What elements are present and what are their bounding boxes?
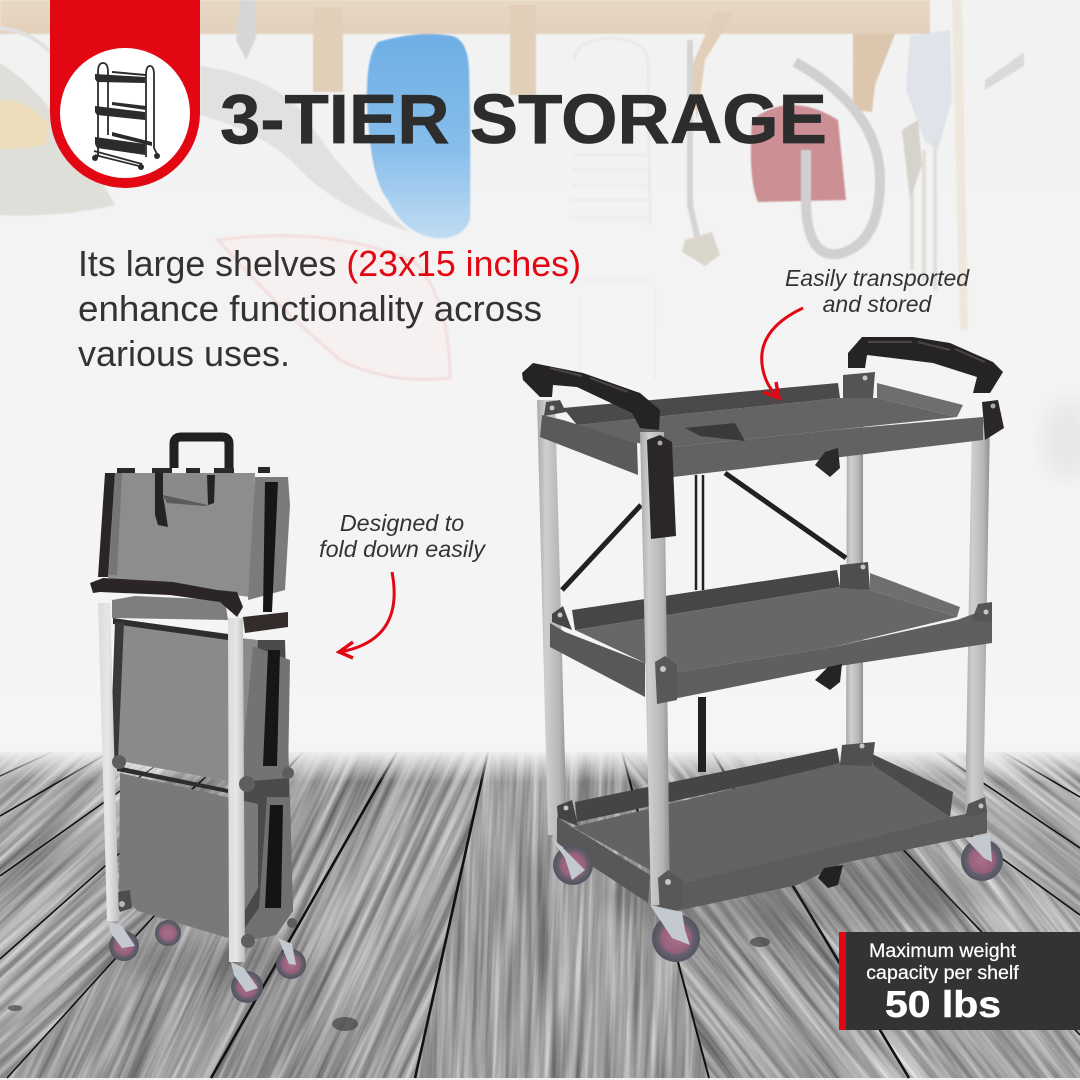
folding lock plates xyxy=(647,400,1004,539)
wall rack xyxy=(985,52,1024,90)
wood knots xyxy=(8,937,770,1031)
blue sled xyxy=(367,34,470,238)
callout: easily transported: Easily transported xyxy=(785,265,970,291)
vacuum tube on wall xyxy=(690,40,698,240)
corner brackets xyxy=(655,656,683,914)
wooden floor xyxy=(0,746,1080,1078)
folded cart wheels xyxy=(108,920,306,1003)
floor shadows xyxy=(105,857,980,982)
plank gaps xyxy=(0,752,1080,1078)
weight capacity badge xyxy=(839,932,1080,1030)
folded side brackets xyxy=(112,755,297,948)
front pole xyxy=(640,432,670,905)
main assembled cart xyxy=(522,337,1004,962)
folded cart poles xyxy=(98,603,245,962)
bottom tier surface xyxy=(573,763,950,883)
callout: easily transported: and stored xyxy=(823,291,933,317)
badge background xyxy=(839,932,1080,1030)
folded cart upper bracket xyxy=(112,596,228,620)
arrow: points to top shelf xyxy=(762,308,803,398)
intro text xyxy=(78,243,581,374)
middle tier surface xyxy=(575,587,957,672)
middle tier wall xyxy=(572,570,840,630)
shelf: bottom tier xyxy=(557,742,987,915)
soft shadow on wall xyxy=(1042,400,1080,480)
background wall xyxy=(0,0,1080,760)
garden tools xyxy=(902,120,935,290)
folded middle panel xyxy=(110,618,290,793)
bottom tier wall xyxy=(575,748,840,822)
intro text: Its large shelves (23x15 inches) xyxy=(78,243,581,284)
badge value: 50 lbs xyxy=(885,984,1001,1025)
top tier surface xyxy=(577,398,957,447)
right handle xyxy=(848,337,1003,393)
badge label: capacity per shelf xyxy=(866,962,1019,984)
title: 3-TIER STORAGE xyxy=(220,80,827,158)
icon: 3-tier cart xyxy=(92,63,160,170)
hanging straps xyxy=(236,0,256,60)
wood grain xyxy=(0,752,1080,1078)
folded bottom panel xyxy=(112,773,293,941)
hanging towel xyxy=(906,30,952,150)
left handle xyxy=(522,363,660,430)
shelf: top tier xyxy=(540,372,983,477)
badge: red ribbon with cart icon xyxy=(50,0,200,188)
faded garage scene xyxy=(0,0,1024,380)
wooden beam xyxy=(0,0,930,120)
vacuum cleaner xyxy=(751,62,880,254)
top tier wall xyxy=(563,383,840,425)
arrow: points to folded cart xyxy=(339,572,394,658)
shelf: middle tier xyxy=(550,562,992,703)
folded panel backing xyxy=(230,640,293,938)
callout: easily transported xyxy=(785,265,970,317)
corner bolts xyxy=(550,376,988,885)
folded cart handle xyxy=(90,578,288,633)
vacuum nozzle xyxy=(682,232,720,266)
intro text: various uses. xyxy=(78,333,290,374)
badge label: Maximum weight xyxy=(869,940,1017,962)
floor fade into wall xyxy=(0,746,1080,782)
intro text: enhance functionality across xyxy=(78,288,542,329)
red ribbon xyxy=(50,0,200,188)
cross braces xyxy=(562,473,846,772)
callout: designed to fold xyxy=(319,510,486,562)
rear poles xyxy=(537,380,990,835)
long wooden poles xyxy=(952,0,968,330)
badge label xyxy=(866,940,1019,984)
folded top panel xyxy=(98,437,290,612)
folded carry handle xyxy=(174,437,229,468)
stepladder xyxy=(570,38,655,380)
main cart wheels xyxy=(551,834,1003,962)
callout: designed to fold: fold down easily xyxy=(319,536,486,562)
red accent bar xyxy=(839,932,846,1030)
folded cart xyxy=(90,437,306,1003)
plank shading xyxy=(0,752,1080,1078)
parked car xyxy=(0,28,450,380)
callout: designed to fold: Designed to xyxy=(340,510,464,536)
white circle xyxy=(60,48,190,178)
